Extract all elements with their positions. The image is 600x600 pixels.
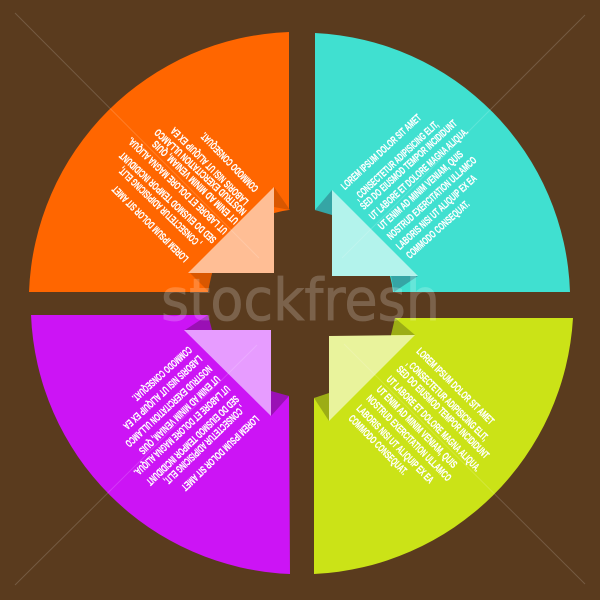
teal text block: UT LABORE ET DOLORE MAGNA ALIQUA.	[367, 126, 471, 222]
purple text block: SED DO EIUSMOD TEMPOR INCIDIDUNT	[143, 393, 241, 488]
orange text block: UT LABORE ET DOLORE MAGNA ALIQUA.	[125, 135, 230, 236]
teal text block	[339, 112, 480, 261]
green text block: NOSTRUD EXERCITATION ULLAMCO	[364, 393, 454, 484]
green text block: UT ENIM AD MINIM VENIAM, QUIS	[374, 384, 459, 471]
purple text block: LABORIS NISI UT ALIQUIP EX EA	[120, 353, 204, 432]
teal sector	[315, 33, 570, 292]
teal text block: SED DO EIUSMOD TEMPOR INCIDIDUNT	[358, 118, 460, 212]
purple sector	[31, 315, 290, 574]
purple text block	[120, 344, 261, 493]
green fold shadow left	[314, 393, 329, 421]
purple text block: COMMODO CONSEQUAT.	[129, 344, 194, 403]
panel: green quadrant	[314, 318, 573, 574]
green fold shadow top	[391, 318, 415, 335]
orange fold shadow top	[274, 187, 290, 210]
teal text block: LOREM IPSUM DOLOR SIT AMET	[339, 112, 424, 192]
green sector	[314, 318, 573, 574]
green text block	[346, 346, 497, 486]
purple text block: , CONSECTETUR ADIPISICING ELIT,	[161, 403, 247, 486]
watermark: stockfresh	[161, 266, 440, 334]
purple fold shadow right	[271, 391, 289, 416]
green text block: COMMODO CONSEQUAT.	[346, 413, 410, 478]
orange text block: SED DO EIUSMOD TEMPOR INCIDIDUNT	[117, 149, 219, 245]
teal folded corner	[332, 190, 418, 276]
orange text block: NOSTRUD EXERCITATION ULLAMCO	[152, 126, 249, 217]
green text block: LOREM IPSUM DOLOR SIT AMET	[414, 346, 497, 428]
teal fold shadow top	[315, 190, 332, 215]
purple text block: UT LABORE ET DOLORE MAGNA ALIQUA.	[131, 383, 232, 478]
green text block: , CONSECTETUR ADIPISICING ELIT,	[404, 358, 491, 444]
panel: teal quadrant	[315, 33, 570, 292]
orange fold shadow bottom	[190, 273, 212, 291]
purple fold shadow top	[185, 315, 212, 330]
teal fold shadow bottom	[391, 276, 418, 292]
orange text block: , CONSECTETUR ADIPISICING ELIT,	[117, 164, 204, 249]
orange folded corner	[188, 187, 274, 273]
green text block: SED DO EIUSMOD TEMPOR INCIDIDUNT	[394, 364, 492, 462]
teal text block: , CONSECTETUR ADIPISICING ELIT,	[352, 119, 441, 203]
orange text block: UT ENIM AD MINIM VENIAM, QUIS	[150, 138, 241, 226]
orange text block: LOREM IPSUM DOLOR SIT AMET	[110, 183, 191, 264]
orange text block: LABORIS NISI UT ALIQUIP EX EA	[168, 124, 251, 207]
purple text block: NOSTRUD EXERCITATION ULLAMCO	[123, 363, 214, 449]
teal text block: UT ENIM AD MINIM VENIAM, QUIS	[376, 149, 466, 232]
purple folded corner	[184, 330, 271, 416]
orange sector	[29, 32, 289, 292]
green folded corner	[329, 335, 415, 421]
orange text block	[110, 124, 261, 264]
purple text block: UT ENIM AD MINIM VENIAM, QUIS	[136, 373, 222, 456]
teal text block: NOSTRUD EXERCITATION ULLAMCO	[385, 155, 479, 242]
green text block: UT LABORE ET DOLORE MAGNA ALIQUA.	[384, 374, 483, 474]
panel: orange quadrant	[29, 32, 290, 292]
orange text block: COMMODO CONSEQUAT.	[198, 130, 261, 194]
purple text block: LOREM IPSUM DOLOR SIT AMET	[178, 413, 261, 493]
teal text block: LABORIS NISI UT ALIQUIP EX EA	[394, 172, 480, 252]
panel: purple quadrant	[31, 315, 290, 574]
green text block: LABORIS NISI UT ALIQUIP EX EA	[354, 403, 436, 486]
teal text block: COMMODO CONSEQUAT.	[404, 198, 472, 261]
